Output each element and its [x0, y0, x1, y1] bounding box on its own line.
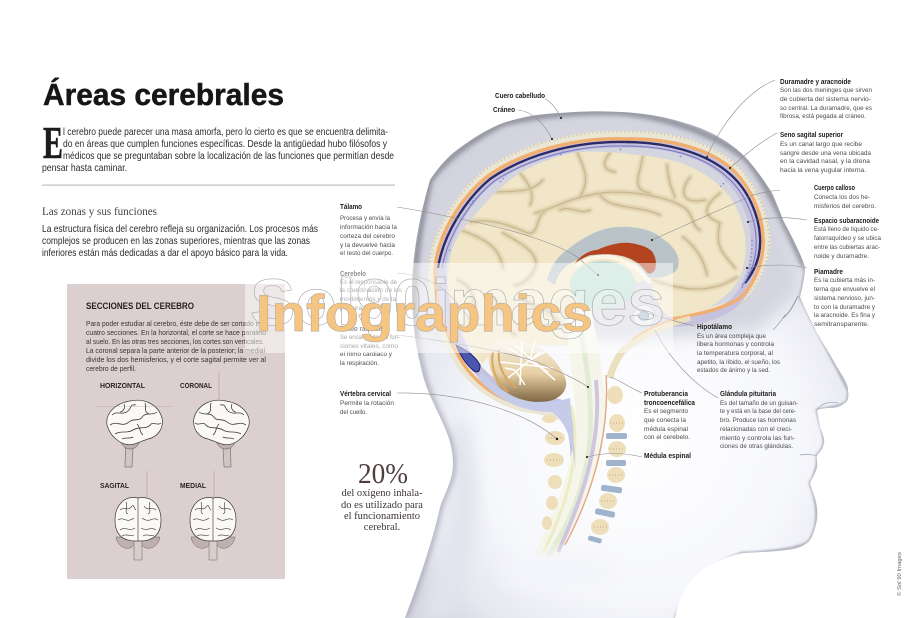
skull bone: [431, 134, 767, 418]
callout: cerebelo: la coordinación de los: [340, 287, 403, 294]
callout: protuberancia troncoencefálica: troncoencefálica: [644, 400, 695, 407]
credit: © Sol 90 Images: [896, 551, 903, 596]
callout: bulbo raquídeo: ciones vitales, como: [340, 343, 398, 350]
callout: cerebelo: movimientos y de la: [340, 296, 396, 303]
callout: espacio subaracnoide: [814, 218, 881, 260]
callout: tálamo: corteza del cerebro: [340, 233, 395, 240]
venous sinus blob: [456, 345, 480, 372]
callout: protuberancia troncoencefálica: Protuberancia: [644, 391, 688, 398]
callout: glándula pituitaria: ciones de otras glándulas.: [720, 443, 793, 450]
callout: piamadre: Es la cubierta más in-: [814, 277, 875, 284]
body text: La estructura física del cerebro refleja su organización. Los procesos más: [42, 224, 318, 235]
panel heading: SECCIONES DEL CEREBRO: [86, 301, 194, 311]
head illustration: [400, 100, 860, 618]
dura orange layer: [435, 139, 763, 553]
label: cráneo: Cráneo: [493, 107, 515, 114]
panel: secciones del cerebro: [67, 284, 285, 579]
body text: inferiores están más dedicadas a dar el apoyo básico para la vida.: [42, 248, 288, 259]
callout: bulbo raquídeo: Se encarga de las fun-: [340, 334, 400, 341]
callout: hipotálamo: [697, 324, 781, 374]
face contour shadow: [675, 267, 848, 618]
brain: sagital: [100, 471, 161, 560]
vertebrae: [542, 386, 626, 535]
brain cerebrum: [448, 152, 746, 364]
callout: vértebra cervical: Vértebra cervical: [340, 391, 391, 398]
body text: complejos se producen en las zonas superiores, mientras que las zonas: [42, 236, 310, 247]
callout: médula espinal: Médula espinal: [644, 453, 691, 460]
brain: sagital: SAGITAL: [100, 483, 130, 490]
leader lines: [397, 80, 807, 458]
neck shading: [423, 426, 478, 618]
callout: piamadre: to con la duramadre y: [814, 304, 876, 311]
callout: cerebelo: postura.: [340, 305, 364, 312]
callout: piamadre: [814, 269, 876, 328]
callout: espacio subaracnoide: falorraquídeo y se ubica: [814, 235, 881, 242]
callout: vértebra cervical: Permite la rotación: [340, 400, 394, 407]
callout: 20%: 20%: [358, 459, 408, 490]
callout: tálamo: información hacia la: [340, 224, 397, 231]
brain: horizontal: [96, 383, 172, 467]
callout: bulbo raquídeo: Bulbo raquídeo: [340, 326, 386, 333]
title: Áreas cerebrales: [43, 77, 284, 112]
callout: bulbo raquídeo: el ritmo cardiaco y: [340, 351, 393, 358]
intro text: pensar hasta caminar.: [42, 163, 127, 174]
watermark: Sol90images: Sol90images: [250, 265, 665, 339]
callout: espacio subaracnoide: noide y duramadre.: [814, 253, 869, 260]
gyri: [458, 152, 737, 335]
callout: tálamo: Tálamo: [340, 204, 362, 211]
callout: 20%: del oxígeno inhala-: [341, 488, 423, 499]
brain: horizontal: HORIZONTAL: [100, 383, 146, 390]
csf under cerebellum: [478, 372, 576, 470]
callout: duramadre y aracnoide: de cubierta del sistema nervio-: [780, 96, 871, 103]
panel text: divide los dos hemisferios, y el corte sagital permite ver al: [86, 355, 266, 364]
intervertebral discs: [587, 433, 627, 544]
brain: medial: MEDIAL: [180, 483, 207, 490]
brain: coronal: CORONAL: [180, 383, 213, 390]
callout: glándula pituitaria: bro. Produce las hormonas: [720, 417, 797, 424]
callout: protuberancia troncoencefálica: [644, 391, 695, 441]
callout: 20%: [341, 459, 423, 533]
back of neck shadow: [405, 340, 453, 618]
callout: glándula pituitaria: te y está en la base del cere-: [720, 408, 796, 415]
callout: duramadre y aracnoide: [780, 79, 873, 120]
panel text: Para poder estudiar al cerebro, éste debe de ser cortado en: [86, 319, 263, 328]
callout: hipotálamo: apetito, la líbido, el sueño, los: [697, 359, 781, 366]
callout: glándula pituitaria: relacionadas con el creci-: [720, 426, 792, 433]
scalp band shading: [460, 211, 800, 344]
callout: cerebelo: Cerebelo: [340, 271, 366, 278]
callout: duramadre y aracnoide: Son las dos meninges que sirven: [780, 87, 872, 94]
meninges lilac band: [441, 143, 756, 475]
callout: tálamo: Procesa y envía la: [340, 215, 390, 222]
body text: [42, 224, 318, 259]
white band: [576, 257, 650, 283]
panel text: cerebro de perfil.: [86, 364, 136, 373]
intro text: médicos que se preguntaban sobre la localización de las funciones que permitían desde: [63, 151, 394, 162]
callout: espacio subaracnoide: entre las cubiertas arac-: [814, 244, 880, 251]
callout: cuerpo calloso: misferios del cerebro.: [814, 203, 876, 210]
panel text: La coronal separa la parte anterior de la posterior; la medial: [86, 346, 265, 355]
watermark: Infographics: Infographics: [256, 285, 593, 343]
vertebra texture: [547, 423, 625, 527]
intro text: [42, 117, 394, 174]
drop cap: E: [43, 117, 63, 168]
brainstem and spinal cord: [533, 305, 607, 556]
callout: espacio subaracnoide: Espacio subaracnoide: [814, 218, 879, 225]
callout: cuerpo calloso: [814, 185, 876, 210]
head silhouette: [400, 100, 860, 618]
callout: tálamo: el resto del cuerpo.: [340, 250, 393, 257]
callout: cuerpo calloso: Conecta los dos he-: [814, 194, 870, 201]
skull base and pituitary: [610, 305, 692, 378]
callout: hipotálamo: estados de ánimo y la sed.: [697, 367, 770, 374]
panel text: [86, 319, 266, 373]
watermark: [245, 263, 673, 353]
callout: piamadre: Piamadre: [814, 269, 843, 276]
callout: seno sagital superior: en la cavidad nasal, y la drena: [780, 158, 870, 165]
panel text: cuatro secciones. En la horizontal, el corte se hace paralelo: [86, 328, 266, 337]
callout: piamadre: terna que envuelve el: [814, 286, 876, 293]
subheading: Las zonas y sus funciones: [42, 206, 157, 218]
spine fade-out: [500, 552, 620, 592]
label: cuero cabelludo: Cuero cabelludo: [495, 93, 545, 100]
subarachnoid marks: [449, 143, 752, 288]
callout: espacio subaracnoide: Está lleno de líquido ce-: [814, 226, 879, 233]
callout: vértebra cervical: [340, 391, 394, 416]
callout: seno sagital superior: [780, 132, 871, 174]
callout: hipotálamo: Es un área compleja que: [697, 333, 766, 340]
callout: vértebra cervical: del cuello.: [340, 409, 367, 416]
callout: 20%: do es utilizado para: [341, 500, 423, 511]
callout: hipotálamo: la temperatura corporal, al: [697, 350, 774, 357]
callout: duramadre y aracnoide: so central. La duramadre, que es: [780, 105, 873, 112]
callout: 20%: cerebral.: [364, 522, 400, 533]
callout: hipotálamo: Hipotálamo: [697, 324, 732, 331]
callout: piamadre: sistema nervioso, jun-: [814, 295, 875, 302]
callout: tálamo: y la devuelve hacia: [340, 242, 395, 249]
brain: medial: [180, 471, 236, 560]
callout: seno sagital superior: sangre desde una vena ubicada: [780, 150, 871, 157]
callout: bulbo raquídeo: la respiración.: [340, 360, 379, 367]
callout: cuerpo calloso: Cuerpo calloso: [814, 185, 855, 192]
scalp edge shadow: [414, 112, 805, 340]
callout: bulbo raquídeo: [340, 326, 400, 367]
sinus cavity: [740, 262, 753, 303]
thalamus: [570, 261, 636, 309]
callout: hipotálamo: libera hormonas y controla: [697, 341, 774, 348]
callout: seno sagital superior: Seno sagital superior: [780, 132, 843, 139]
callout: duramadre y aracnoide: Duramadre y aracnoide: [780, 79, 851, 86]
callout: seno sagital superior: hacia la vena yugular interna.: [780, 167, 866, 174]
intro text: l cerebro puede parecer una masa amorfa, pero lo cierto es que se encuentra delimita-: [63, 127, 388, 138]
callout: glándula pituitaria: [720, 391, 798, 450]
callout: protuberancia troncoencefálica: médula espinal: [644, 426, 689, 433]
callout: 20%: el funcionamiento: [344, 511, 420, 522]
callout: piamadre: la aracnoide. Es fina y: [814, 312, 876, 319]
fornix red: [575, 243, 656, 274]
callout: tálamo: [340, 204, 397, 257]
superior sagittal sinus: [438, 142, 760, 283]
callout: cerebelo: [340, 271, 403, 312]
callout: protuberancia troncoencefálica: Es el segmento: [644, 408, 688, 415]
callout: glándula pituitaria: Es del tamaño de un guisan-: [720, 400, 798, 407]
corpus callosum: [547, 227, 679, 285]
callout: protuberancia troncoencefálica: que conecta la: [644, 417, 686, 424]
callout: protuberancia troncoencefálica: con el cerebelo.: [644, 434, 690, 441]
callout: glándula pituitaria: Glándula pituitaria: [720, 391, 776, 398]
callout: cerebelo: Es el responsable de: [340, 279, 397, 286]
callout: duramadre y aracnoide: fibrosa, está pegada al cráneo.: [780, 113, 866, 120]
brain: coronal: [180, 372, 249, 467]
cerebellum: [489, 340, 566, 402]
callout: glándula pituitaria: miento y controla las fun-: [720, 435, 795, 442]
panel text: al suelo. En las otras tres secciones, los cortes son verticales.: [86, 337, 264, 346]
nose and lips detail: [773, 296, 838, 455]
intro text: do en áreas que cumplen funciones específicas. Desde la antigüedad hubo filósofos y: [63, 139, 388, 150]
callout: seno sagital superior: Es un canal largo que recibe: [780, 141, 862, 148]
callout: piamadre: semitransparente.: [814, 321, 869, 328]
